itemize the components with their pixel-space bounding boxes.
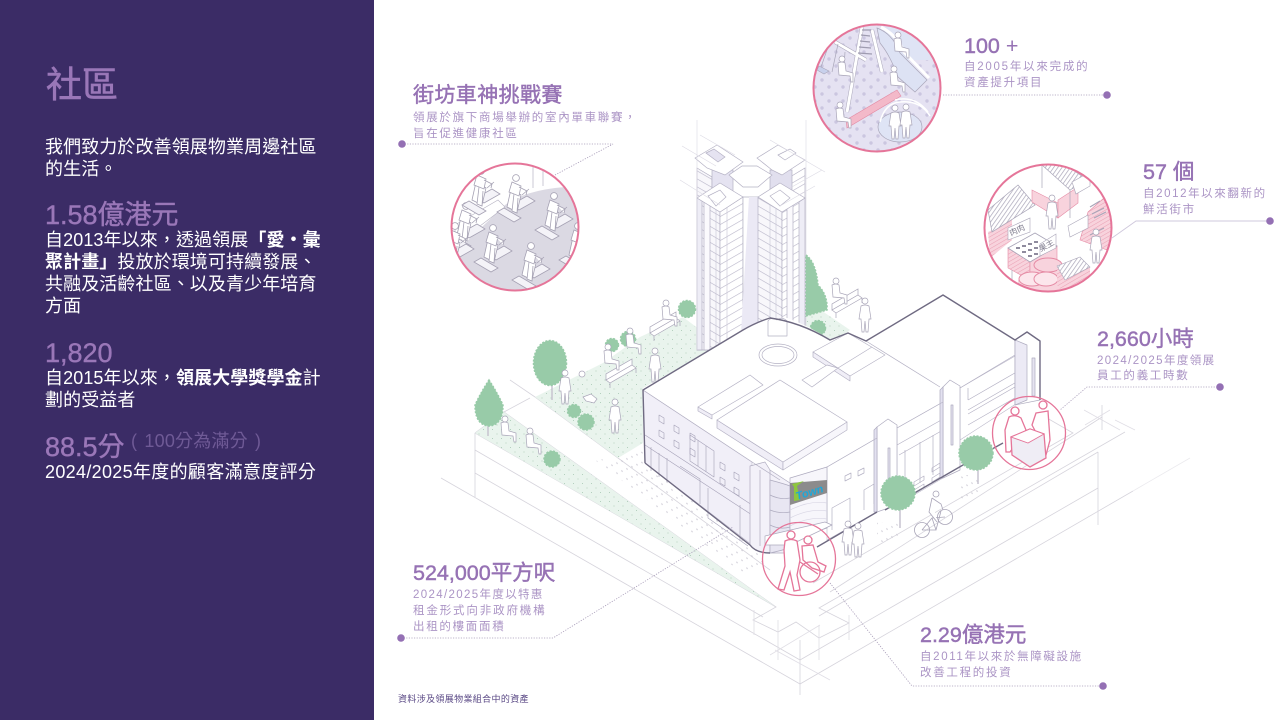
label: 100+: 100 + xyxy=(964,34,1018,58)
stat: 1.58億港元: 1.58億港元 xyxy=(45,200,179,230)
stat: 1,820: 1,820 xyxy=(45,338,113,368)
building outline xyxy=(643,295,1040,463)
label: 57 個: 鮮活街市 xyxy=(1143,204,1196,216)
stat: 1,820: 劃的受益者 xyxy=(45,390,136,410)
leader: cycling xyxy=(398,140,613,175)
building roof xyxy=(643,295,1040,553)
stat: 1,820: 自2015年以來，領展大學獎學金計 xyxy=(45,368,321,388)
corner tower xyxy=(750,462,832,553)
stat: 1,820 xyxy=(45,338,321,410)
back stall xyxy=(1032,190,1058,218)
leader: market xyxy=(1112,217,1274,238)
leader: projects xyxy=(943,91,1111,99)
trees and bushes xyxy=(475,255,827,467)
label: 100+: 資產提升項目 xyxy=(964,77,1043,89)
inset: fresh market xyxy=(984,163,1113,300)
label: 100+: 自2005年以來完成的 xyxy=(964,61,1089,73)
label: 524,000平方呎: 租金形式向非政府機構 xyxy=(413,605,546,617)
label: 57 個: 自2012年以來翻新的 xyxy=(1143,188,1267,200)
tower xyxy=(680,120,825,350)
stat: 1.58億港元: 方面 xyxy=(45,296,81,316)
leader: accessibility xyxy=(830,583,1107,690)
inset: cycling competition xyxy=(450,162,580,292)
label: cycling challenge: 領展於旗下商場舉辦的室內單車聯賽， xyxy=(413,112,637,124)
building xyxy=(643,295,1040,553)
shopping centre sign: Town xyxy=(794,483,825,503)
label: 2.29億港元: 2.29億港元 xyxy=(920,623,1026,647)
intro text xyxy=(45,137,316,179)
panel: left sidebar xyxy=(0,0,374,720)
label: 2,660小時: 員工的義工時數 xyxy=(1097,370,1189,382)
ground lines xyxy=(441,380,1190,695)
barrels xyxy=(1042,271,1057,276)
title: 社區 xyxy=(46,64,118,105)
label: 524,000平方呎: 2024/2025年度以特惠 xyxy=(413,589,544,601)
plaza: wedge lawn xyxy=(475,412,776,607)
plaza: rear lawn xyxy=(806,300,850,345)
ladder xyxy=(858,30,872,54)
roof panels xyxy=(698,318,885,470)
swing frame xyxy=(835,27,882,112)
label: cycling challenge: 街坊車神挑戰賽 xyxy=(413,84,563,107)
stat: 1.58億港元: 共融及活齡社區、以及青少年培育 xyxy=(45,274,316,294)
stat: 1.58億港元: 聚計畫」投放於環境可持續發展、 xyxy=(45,252,317,272)
stat: 88.5分: ( 100分為滿分 ) xyxy=(131,431,261,451)
cyclist xyxy=(914,491,952,538)
plaza: central lawn xyxy=(535,317,720,458)
paved dotted zone xyxy=(595,445,768,575)
label: 57 個 xyxy=(1143,160,1267,216)
pedestrians on street xyxy=(842,521,864,557)
footnote: 資料涉及領展物業組合中的資產 xyxy=(398,694,529,704)
leader: rental floor area xyxy=(397,527,733,642)
building right wall xyxy=(827,438,877,540)
stat: 88.5分: 88.5分 xyxy=(45,432,125,462)
leader: volunteering xyxy=(1060,383,1224,410)
label: 2,660小時: 2,660小時 xyxy=(1097,327,1194,351)
inset: playground xyxy=(814,22,945,152)
shopping centre sign xyxy=(790,480,827,505)
building left wall xyxy=(643,390,752,545)
seesaw xyxy=(846,90,901,128)
intro text: 的生活。 xyxy=(45,159,117,179)
stat: 88.5分 xyxy=(45,431,316,482)
stat: 1.58億港元: 自2013年以來，透過領展「愛・彙 xyxy=(45,230,321,250)
right shelves xyxy=(1080,197,1113,250)
stat: 88.5分: 2024/2025年度的顧客滿意度評分 xyxy=(45,462,316,482)
crate xyxy=(1057,269,1065,290)
label: 2.29億港元 xyxy=(920,623,1083,679)
intro text: 我們致力於改善領展物業周邊社區 xyxy=(45,137,316,157)
inset: fresh market: 肉肉 xyxy=(1008,222,1026,238)
label: 2,660小時: 2024/2025年度領展 xyxy=(1097,355,1216,367)
front faces xyxy=(697,198,720,350)
slide xyxy=(877,28,927,92)
rear faces xyxy=(697,168,712,205)
inset: volunteers xyxy=(992,396,1066,470)
label: 524,000平方呎: 出租的樓面面積 xyxy=(413,621,505,633)
people in plazas xyxy=(501,278,871,454)
label: cycling challenge xyxy=(413,84,637,140)
vendors xyxy=(1046,195,1058,229)
label: 2.29億港元: 改善工程的投資 xyxy=(920,667,1012,679)
signs xyxy=(1008,172,1090,256)
illustration: isometric community scene xyxy=(397,24,1274,695)
inset: wheelchair xyxy=(762,522,836,596)
inset: fresh market: 果主 xyxy=(1037,237,1056,254)
fruit table xyxy=(1008,248,1030,275)
label: 2,660小時 xyxy=(1097,327,1216,382)
label: 2.29億港元: 自2011年以來於無障礙設施 xyxy=(920,651,1083,663)
dots around street trees xyxy=(877,475,980,542)
label: 524,000平方呎 xyxy=(413,561,555,633)
stat: 1.58億港元 xyxy=(45,200,321,316)
street trees xyxy=(881,436,993,528)
left stall xyxy=(988,220,1012,258)
label: 57 個: 57 個 xyxy=(1143,160,1194,184)
label: 100+ xyxy=(964,34,1089,89)
tower roof xyxy=(695,145,805,212)
label: cycling challenge: 旨在促進健康社區 xyxy=(413,128,519,140)
pilasters xyxy=(874,332,1040,512)
label: 524,000平方呎: 524,000平方呎 xyxy=(413,561,555,585)
